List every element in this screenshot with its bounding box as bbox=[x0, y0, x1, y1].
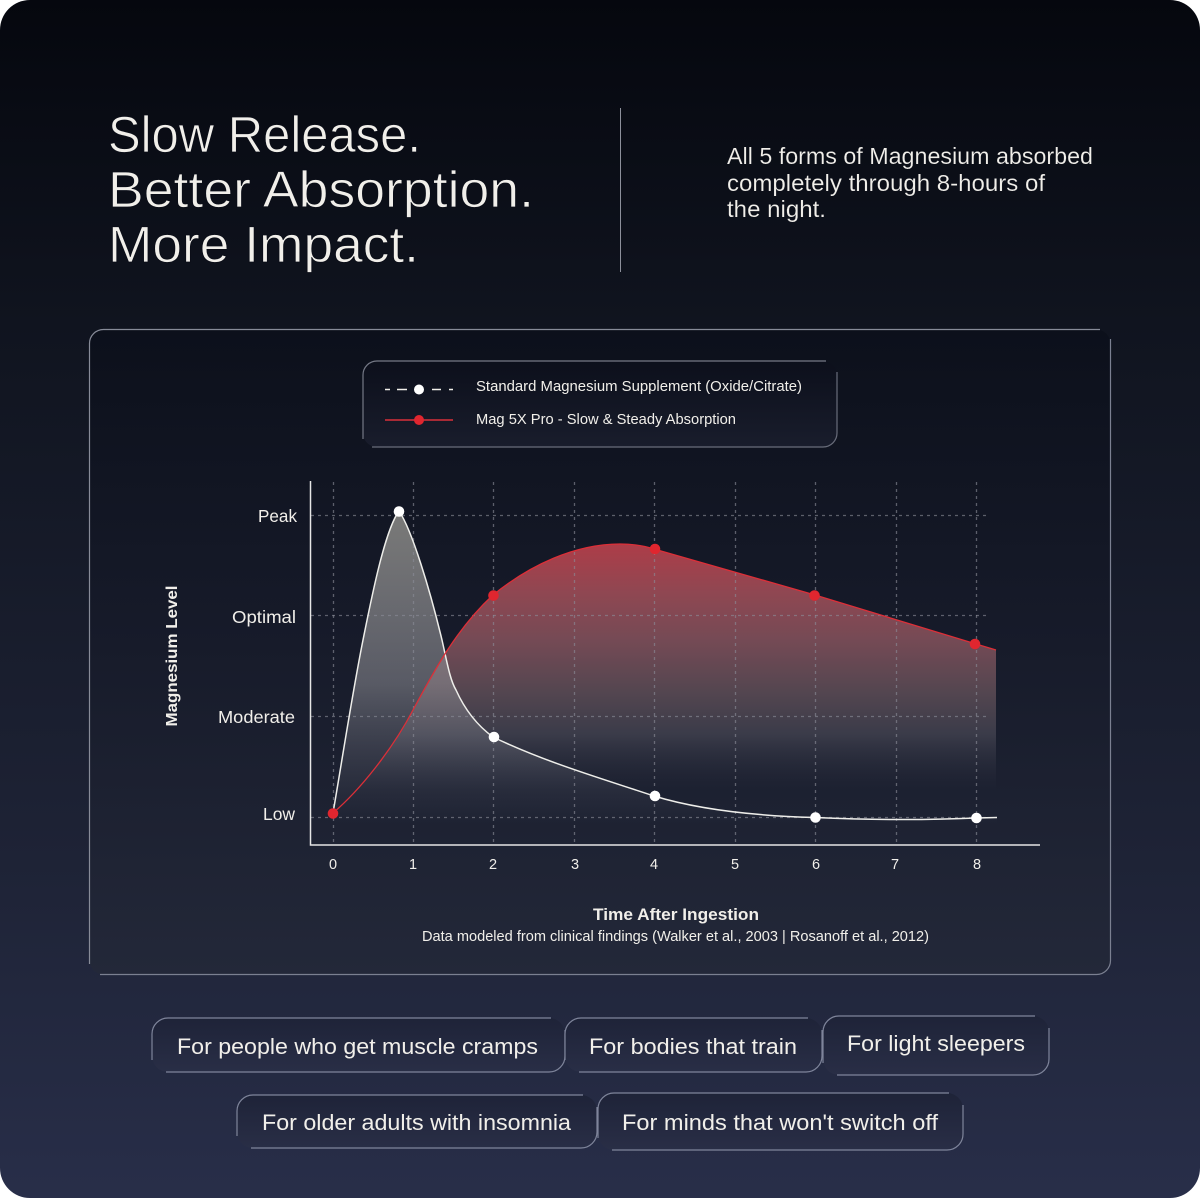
y axis labels: Peak bbox=[258, 506, 297, 526]
chip: minds bbox=[598, 1093, 963, 1150]
intro text bbox=[727, 143, 1093, 222]
x axis labels bbox=[329, 857, 981, 873]
chip: light sleepers bbox=[823, 1016, 1049, 1075]
area: standard supplement bbox=[333, 511, 997, 825]
x axis labels: 8 bbox=[973, 857, 981, 873]
line: standard supplement bbox=[333, 506, 997, 823]
intro text: completely through 8-hours of bbox=[727, 170, 1046, 196]
chip: light sleepers: For light sleepers bbox=[847, 1031, 1025, 1056]
x axis labels: 6 bbox=[812, 857, 820, 873]
title: Slow Release. bbox=[108, 106, 421, 163]
axes bbox=[310, 481, 1040, 845]
chip: minds: For minds that won't switch off bbox=[622, 1110, 939, 1135]
grid bbox=[311, 482, 986, 845]
intro text: All 5 forms of Magnesium absorbed bbox=[727, 143, 1093, 169]
x axis labels: 0 bbox=[329, 857, 337, 873]
panel: chart bbox=[90, 330, 1111, 974]
y axis labels bbox=[218, 506, 297, 824]
x axis labels: 7 bbox=[891, 857, 899, 873]
x axis labels: 5 bbox=[731, 857, 739, 873]
area: Mag 5X Pro bbox=[333, 544, 996, 813]
x axis labels: 3 bbox=[571, 857, 579, 873]
x axis labels: 4 bbox=[650, 857, 658, 873]
y axis labels: Low bbox=[263, 804, 295, 824]
chip: muscle cramps bbox=[152, 1018, 565, 1072]
y axis labels: Moderate bbox=[218, 707, 295, 727]
legend item: Mag 5X Pro: Mag 5X Pro - Slow & Steady Absorption bbox=[476, 412, 736, 428]
legend bbox=[363, 361, 837, 447]
header divider bbox=[620, 108, 621, 272]
title bbox=[108, 106, 534, 273]
x axis labels: 2 bbox=[489, 857, 497, 873]
x axis title: Time After Ingestion bbox=[593, 905, 759, 924]
y axis title: Magnesium Level bbox=[164, 586, 181, 726]
source note: Data modeled from clinical findings (Walker et al., 2003 | Rosanoff et al., 2012) bbox=[422, 929, 929, 945]
title: More Impact. bbox=[108, 216, 419, 273]
chip: bodies that train bbox=[565, 1018, 822, 1072]
x axis labels: 1 bbox=[409, 857, 417, 873]
y axis labels: Optimal bbox=[232, 607, 296, 627]
title: Better Absorption. bbox=[108, 161, 534, 218]
legend item: standard supplement: Standard Magnesium Supplement (Oxide/Citrate) bbox=[476, 379, 802, 395]
chip: older adults bbox=[237, 1095, 597, 1148]
intro text: the night. bbox=[727, 196, 826, 222]
chip: older adults: For older adults with insomnia bbox=[262, 1110, 571, 1135]
chip: bodies that train: For bodies that train bbox=[589, 1034, 797, 1059]
line: Mag 5X Pro bbox=[328, 544, 996, 819]
chip: muscle cramps: For people who get muscle cramps bbox=[177, 1034, 538, 1059]
